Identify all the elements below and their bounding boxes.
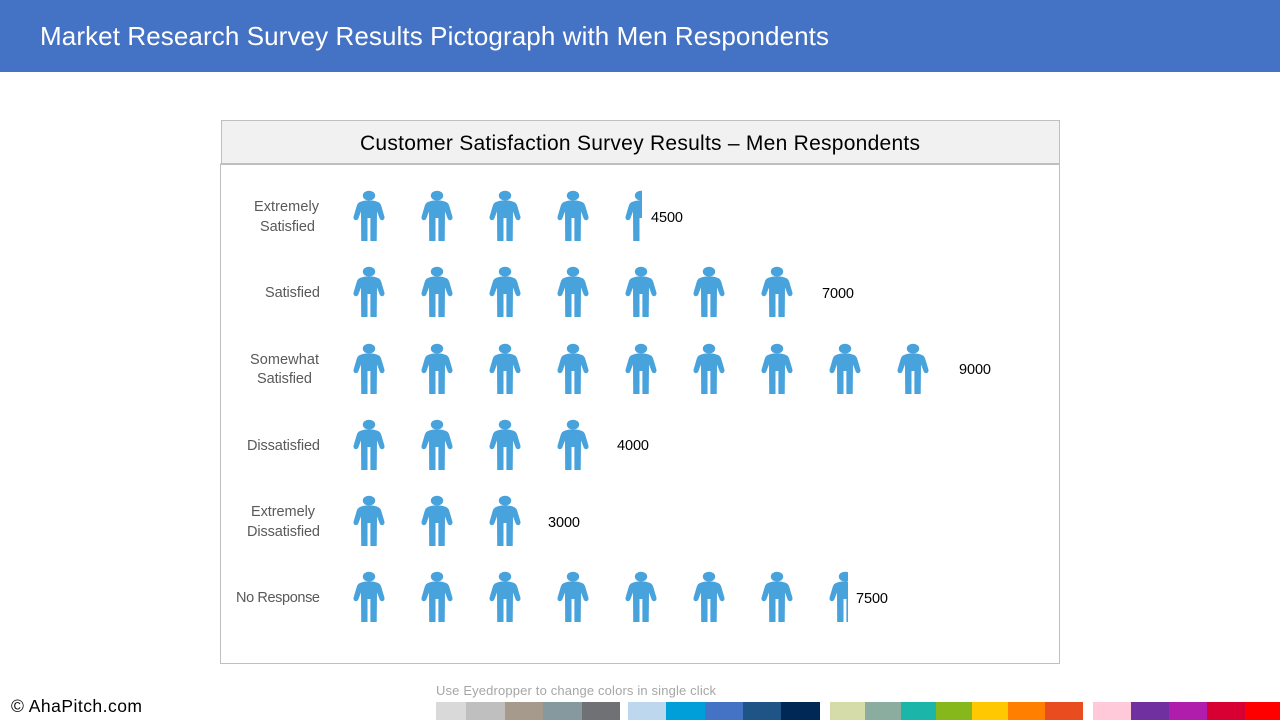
value: 9000: [959, 362, 991, 378]
icons: 3 men: [353, 496, 521, 546]
value: 3000: [548, 515, 580, 531]
icons: 4 men: [353, 420, 589, 470]
row label: Extremely: [251, 504, 316, 520]
row label: [250, 352, 319, 387]
row: Extremely Dissatisfied: [247, 496, 580, 546]
icons: 9 men: [353, 344, 929, 394]
title: Market Research Survey Results Pictograph with Men Respondents: [40, 21, 829, 51]
row label: Dissatisfied: [247, 524, 320, 540]
colour palette: pinks and reds: [1093, 702, 1280, 720]
icons: 4.5 men: [353, 191, 657, 241]
row: Dissatisfied: [247, 420, 649, 470]
icons: 7.5 men: [353, 572, 861, 622]
value: 4000: [617, 438, 649, 454]
row: No Response: [236, 572, 888, 622]
row label: No Response: [236, 590, 320, 606]
footer brand: © AhaPitch.com: [11, 696, 142, 716]
colour palette: neutrals: [436, 702, 620, 720]
row label: Dissatisfied: [247, 438, 320, 454]
value: 7000: [822, 286, 854, 302]
row: Satisfied: [265, 267, 854, 317]
value: 4500: [651, 210, 683, 226]
chart heading: Customer Satisfaction Survey Results – Men Respondents: [360, 132, 920, 155]
chart heading: [221, 120, 1060, 164]
row label: Satisfied: [257, 371, 312, 387]
colour palette: blues: [628, 702, 820, 720]
row label: Somewhat: [250, 352, 319, 368]
row label: [247, 504, 320, 540]
row: Extremely Satisfied: [254, 191, 683, 241]
value: 7500: [856, 591, 888, 607]
colour palette: greens and oranges: [830, 702, 1083, 720]
row label: [254, 199, 320, 235]
icons: 7 men: [353, 267, 793, 317]
row label: Extremely: [254, 199, 320, 215]
row label: Satisfied: [265, 285, 320, 301]
eyedropper hint: Use Eyedropper to change colors in single click: [436, 683, 716, 698]
row: Somewhat Satisfied: [250, 344, 991, 394]
row label: Satisfied: [260, 219, 315, 235]
title banner: [0, 0, 1280, 72]
panel: pictograph chart: [220, 120, 1060, 664]
